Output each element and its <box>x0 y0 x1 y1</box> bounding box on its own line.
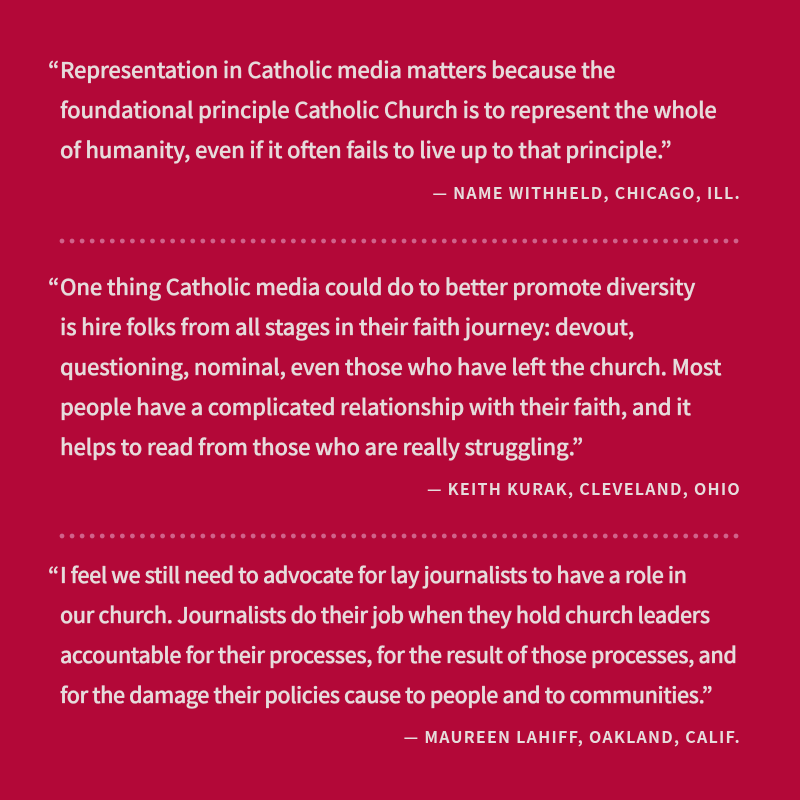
quote text line 2: foundational principle Catholic Church is to represent the whole <box>60 93 717 125</box>
quote text line 3: accountable for their processes, for the result of those processes, and <box>60 639 736 670</box>
quote text line 4: for the damage their policies cause to people and to communities.” <box>60 679 712 710</box>
attribution: — MAUREEN LAHIFF, OAKLAND, CALIF. <box>404 724 741 748</box>
dotted divider 2 <box>60 534 738 538</box>
quote block: Keith Kurak <box>48 270 741 500</box>
quote text line 5: helps to read from those who are really struggling.” <box>60 430 583 462</box>
attribution: — NAME WITHHELD, CHICAGO, ILL. <box>432 180 741 204</box>
quote block: Keith Kurak: “ <box>48 270 59 302</box>
dotted divider 1 <box>60 238 738 244</box>
quote text line 1: One thing Catholic media could do to better promote diversity <box>60 270 695 302</box>
attribution: — KEITH KURAK, CLEVELAND, OHIO <box>427 476 741 500</box>
quote text line 3: of humanity, even if it often fails to live up to that principle.” <box>60 133 672 165</box>
quote text line 1: Representation in Catholic media matters because the <box>60 53 615 85</box>
quote block: Maureen Lahiff <box>48 559 741 748</box>
quote text line 1: I feel we still need to advocate for lay journalists to have a role in <box>60 559 687 590</box>
quote text line 2: our church. Journalists do their job when they hold church leaders <box>60 599 710 630</box>
quote text line 2: is hire folks from all stages in their faith journey: devout, <box>60 310 634 342</box>
quote block: Name Withheld: “ <box>48 53 59 85</box>
quote block: Maureen Lahiff: “ <box>48 559 59 590</box>
quote text line 3: questioning, nominal, even those who have left the church. Most <box>60 350 721 382</box>
quote text line 4: people have a complicated relationship with their faith, and it <box>60 390 691 422</box>
quote block: Name Withheld <box>48 53 741 204</box>
